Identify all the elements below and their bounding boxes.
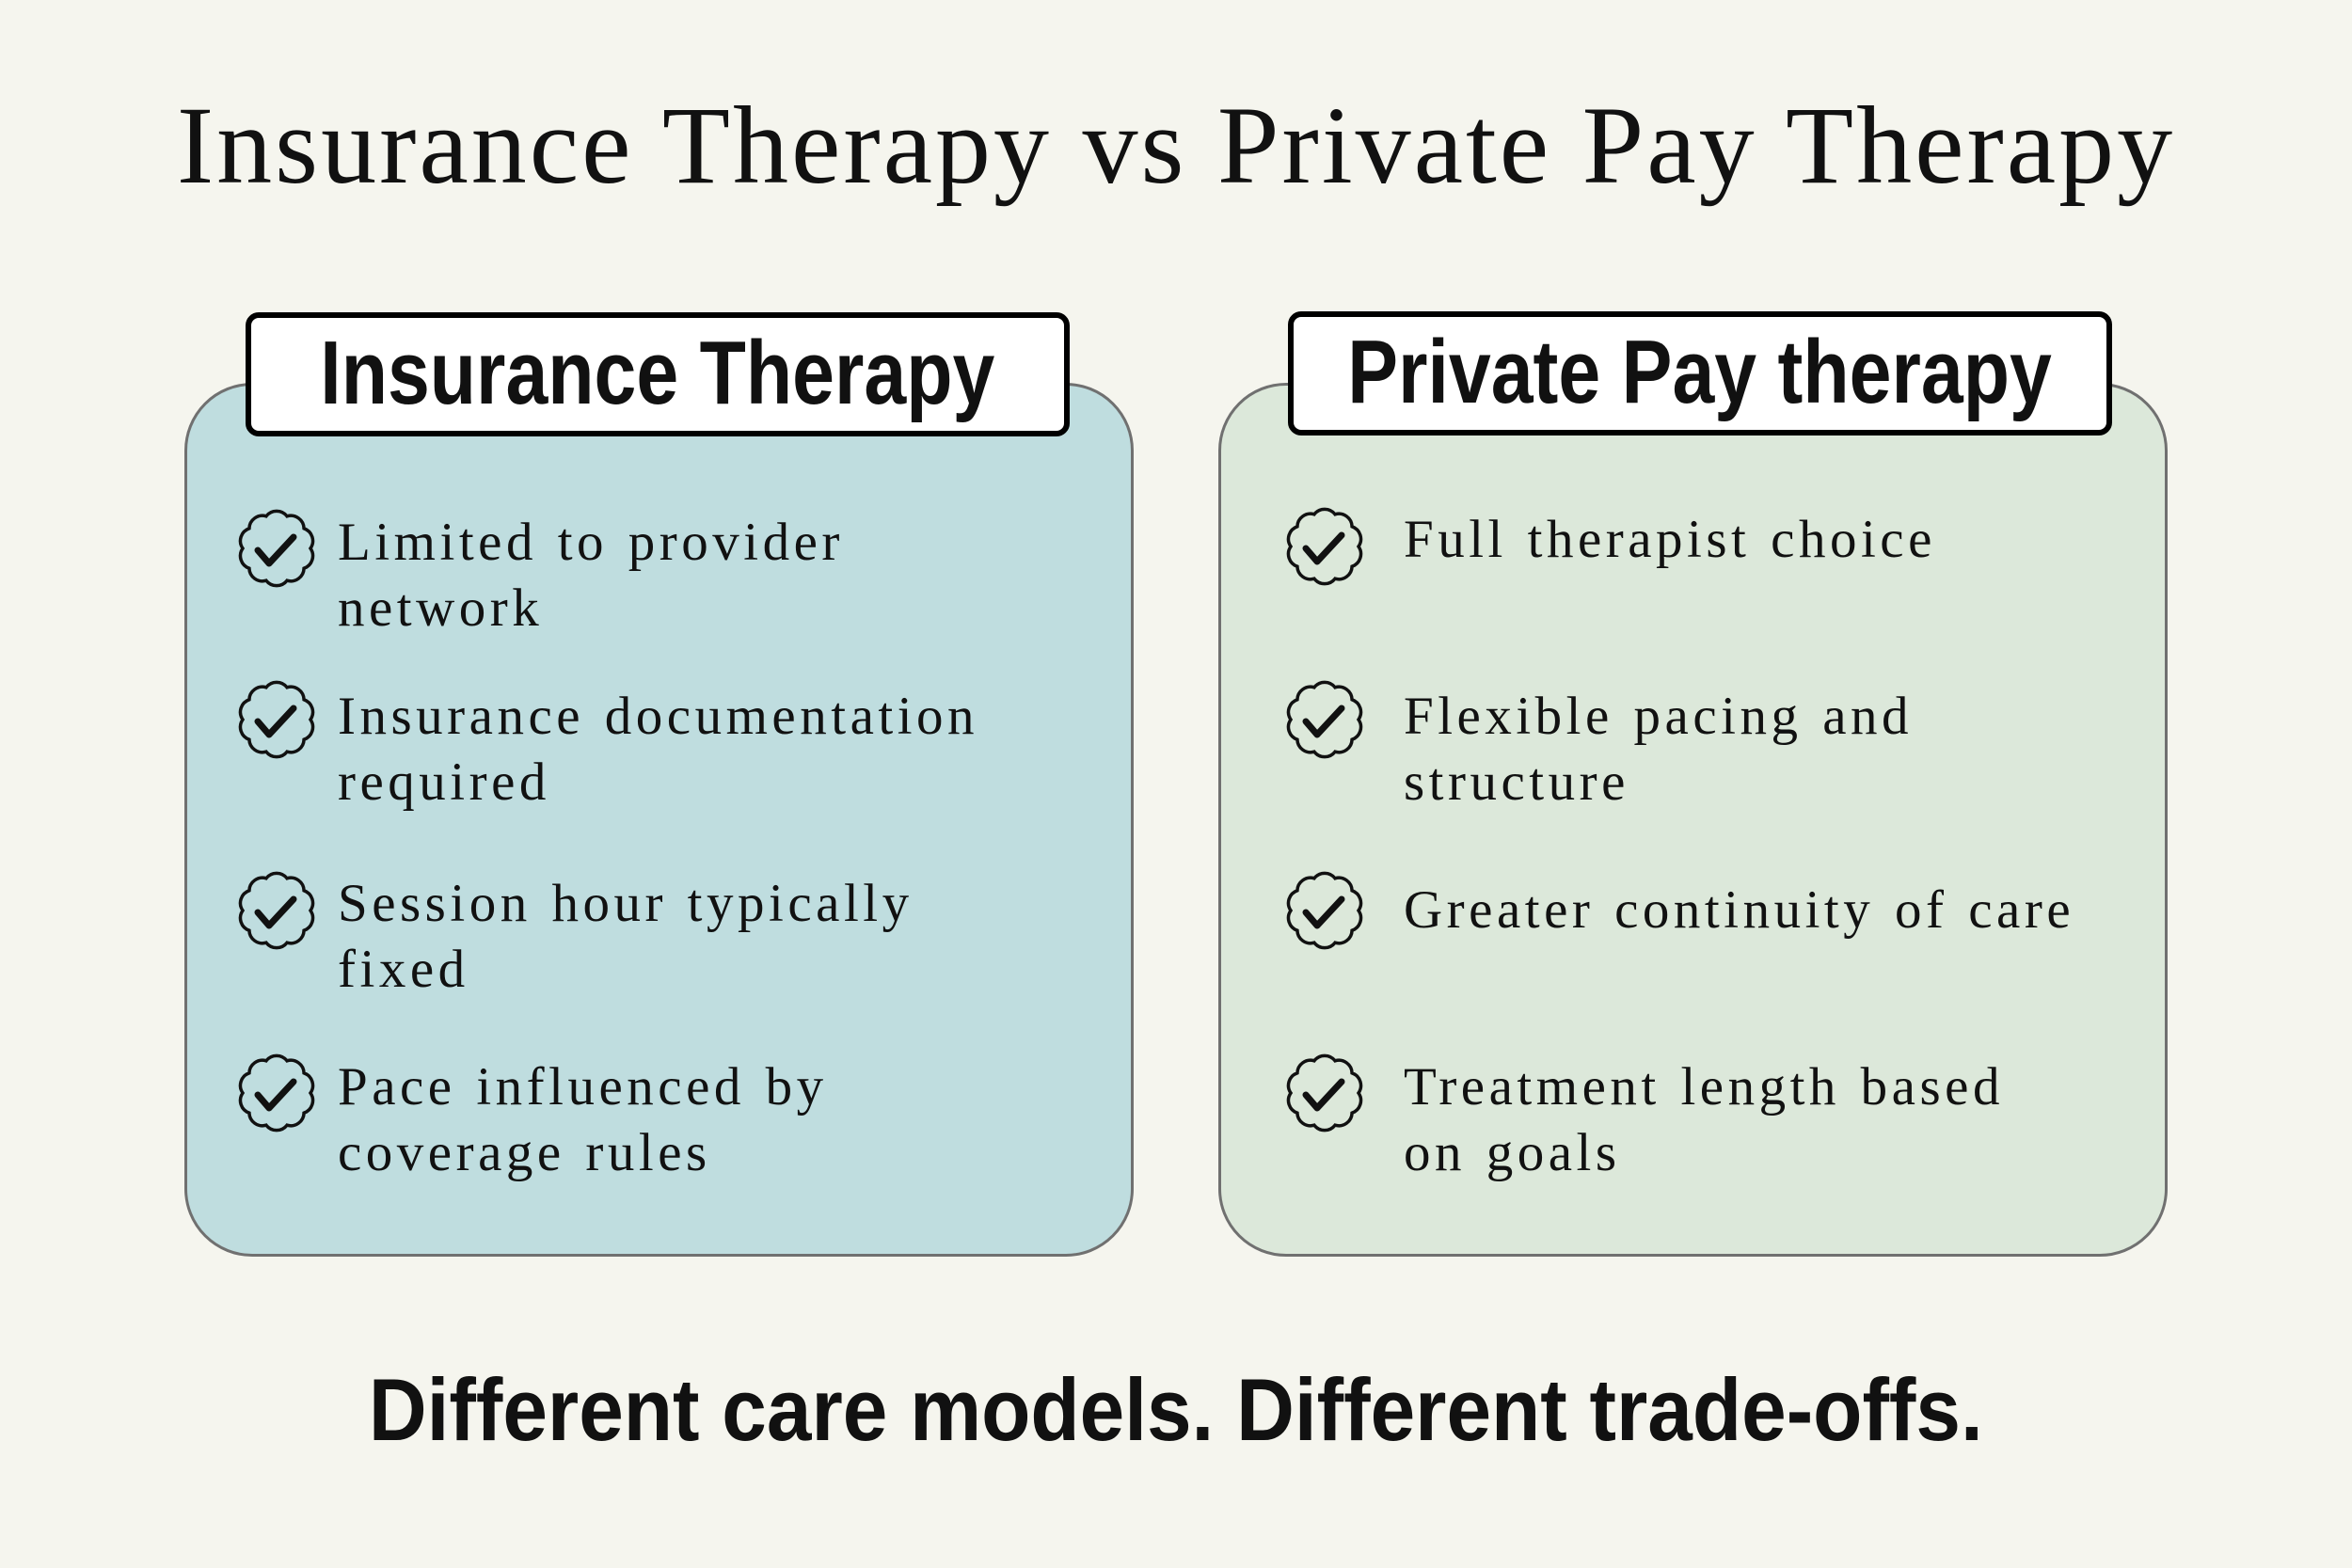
text: continuity: Greater continuity of care	[1404, 880, 2074, 940]
text: pace: coverage rules	[338, 1123, 711, 1182]
heading: private pay therapy	[1288, 311, 2112, 436]
text: flexible pacing: structure	[1404, 752, 1629, 812]
bottom tagline: Different care models. Different trade-offs.	[369, 1360, 1983, 1459]
text: session hour	[338, 874, 914, 999]
panel: insurance therapy	[184, 383, 1134, 1257]
text: limited to provider network	[338, 513, 844, 638]
text: limited to provider network: Limited to provider	[338, 513, 844, 572]
icon: check badge	[1287, 1053, 1362, 1132]
icon: check badge	[239, 681, 314, 758]
text: documentation	[338, 687, 978, 812]
icon: check badge	[1287, 681, 1362, 758]
title: Insurance Therapy vs Private Pay Therapy	[177, 84, 2175, 207]
text: therapist choice: Full therapist choice	[1404, 510, 1936, 569]
text: treatment length: on goals	[1404, 1123, 1621, 1182]
text: session hour: Session hour typically	[338, 874, 914, 933]
text: flexible pacing: Flexible pacing and	[1404, 687, 1913, 746]
icon: check badge	[1287, 508, 1362, 585]
text: treatment length: Treatment length based	[1404, 1057, 2004, 1117]
text: documentation: Insurance documentation	[338, 687, 978, 746]
icon: check badge	[239, 1053, 314, 1132]
text: treatment length	[1404, 1057, 2004, 1182]
text: flexible pacing	[1404, 687, 1913, 812]
text: limited to provider network: network	[338, 578, 543, 638]
text: session hour: fixed	[338, 940, 469, 999]
heading: private pay therapy: Private Pay therapy	[1348, 322, 2052, 422]
text: documentation: required	[338, 752, 550, 812]
icon: check badge	[1287, 871, 1362, 950]
heading: insurance therapy: Insurance Therapy	[320, 323, 995, 423]
heading: insurance therapy	[246, 312, 1070, 436]
text: pace	[338, 1057, 828, 1182]
panel: private pay therapy	[1218, 383, 2168, 1257]
icon: check badge	[239, 871, 314, 950]
text: pace: Pace influenced by	[338, 1057, 828, 1117]
icon: check badge	[239, 510, 314, 587]
